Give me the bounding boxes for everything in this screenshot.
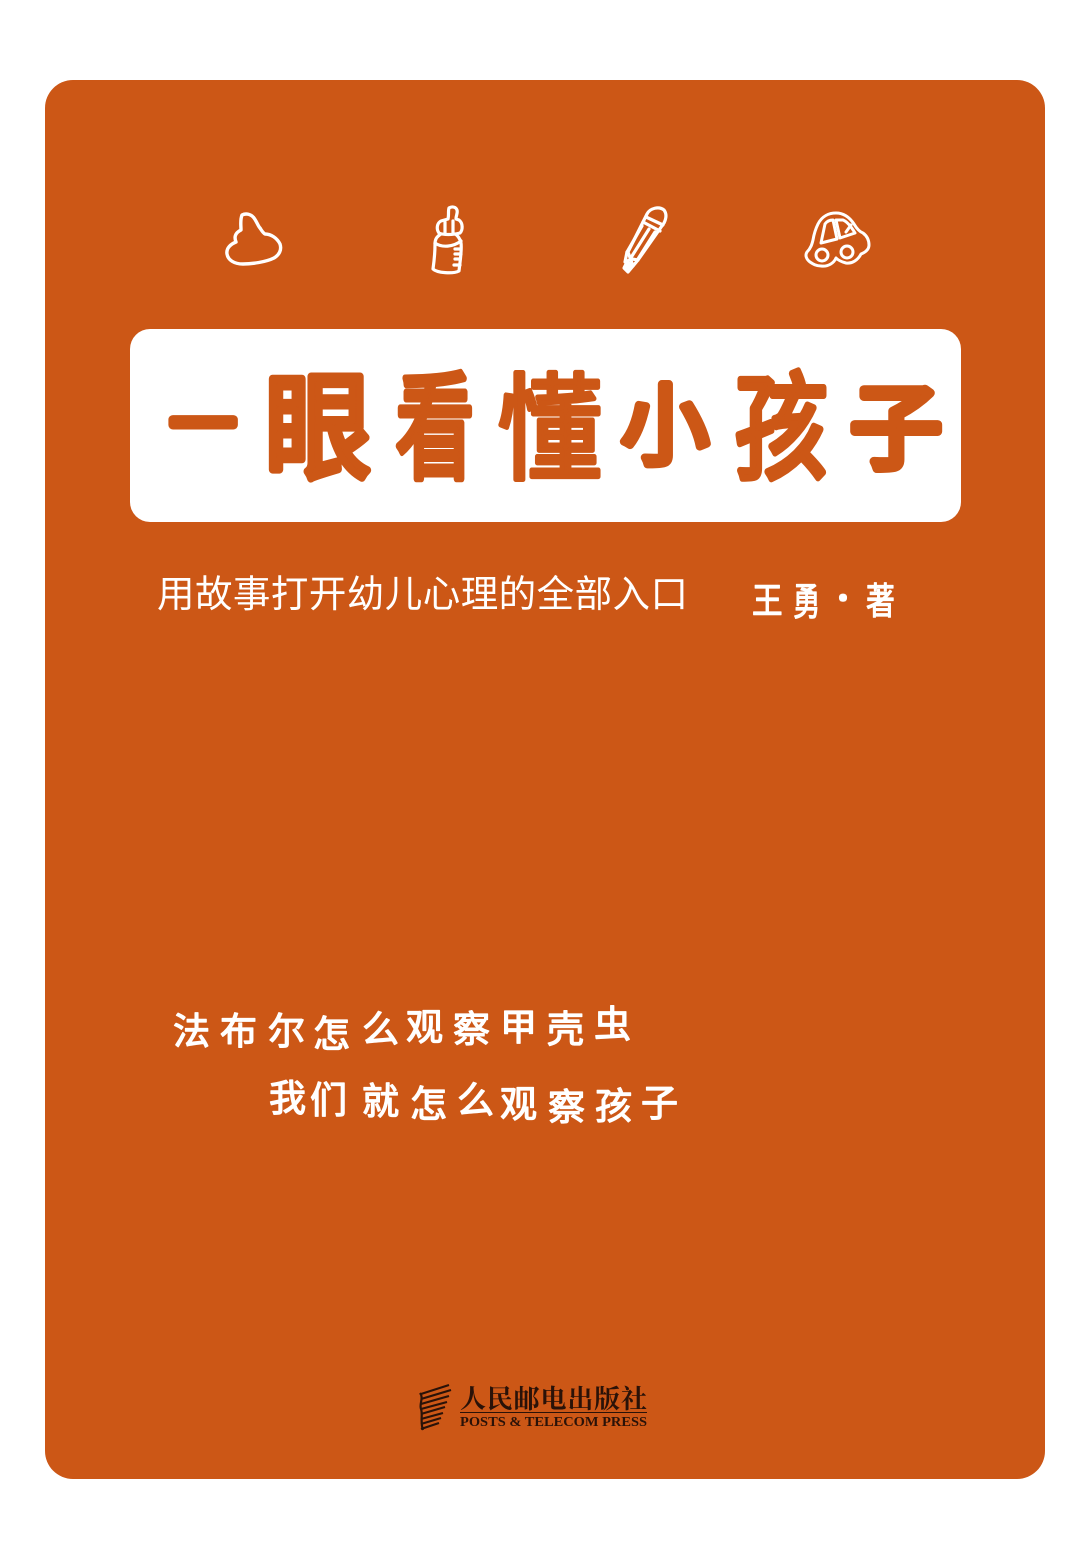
icon: toy car	[806, 213, 869, 266]
publisher english name: POSTS & TELECOM PRESS	[460, 1414, 647, 1429]
author: 王	[752, 571, 783, 624]
author: 勇	[793, 571, 820, 626]
publisher chinese name: 人民邮电出版社	[460, 1385, 647, 1414]
subtitle: 用故事打开幼儿心理的全部入口	[157, 573, 688, 615]
title: 懂	[498, 335, 602, 504]
icon: pencil	[624, 208, 666, 272]
author	[752, 570, 895, 626]
title: 眼	[265, 336, 371, 503]
icon: baby bottle	[433, 207, 462, 273]
author: 著	[866, 572, 895, 625]
publisher rule	[460, 1412, 647, 1413]
title	[170, 335, 942, 504]
title: 孩	[735, 335, 827, 503]
author: ·	[825, 570, 861, 622]
title: 子	[850, 355, 942, 488]
publisher logo	[420, 1385, 647, 1430]
icon: poop	[227, 214, 281, 264]
title: 看	[396, 335, 474, 503]
title: 小	[621, 356, 709, 483]
icon: stacked book mark	[420, 1385, 451, 1430]
title: 一	[170, 372, 236, 468]
panel: white title box	[130, 329, 961, 522]
slogan line 1: 法布尔怎么观察甲壳虫	[173, 994, 631, 1058]
slogan line 2: 我们就怎么观察孩子	[269, 1068, 678, 1131]
